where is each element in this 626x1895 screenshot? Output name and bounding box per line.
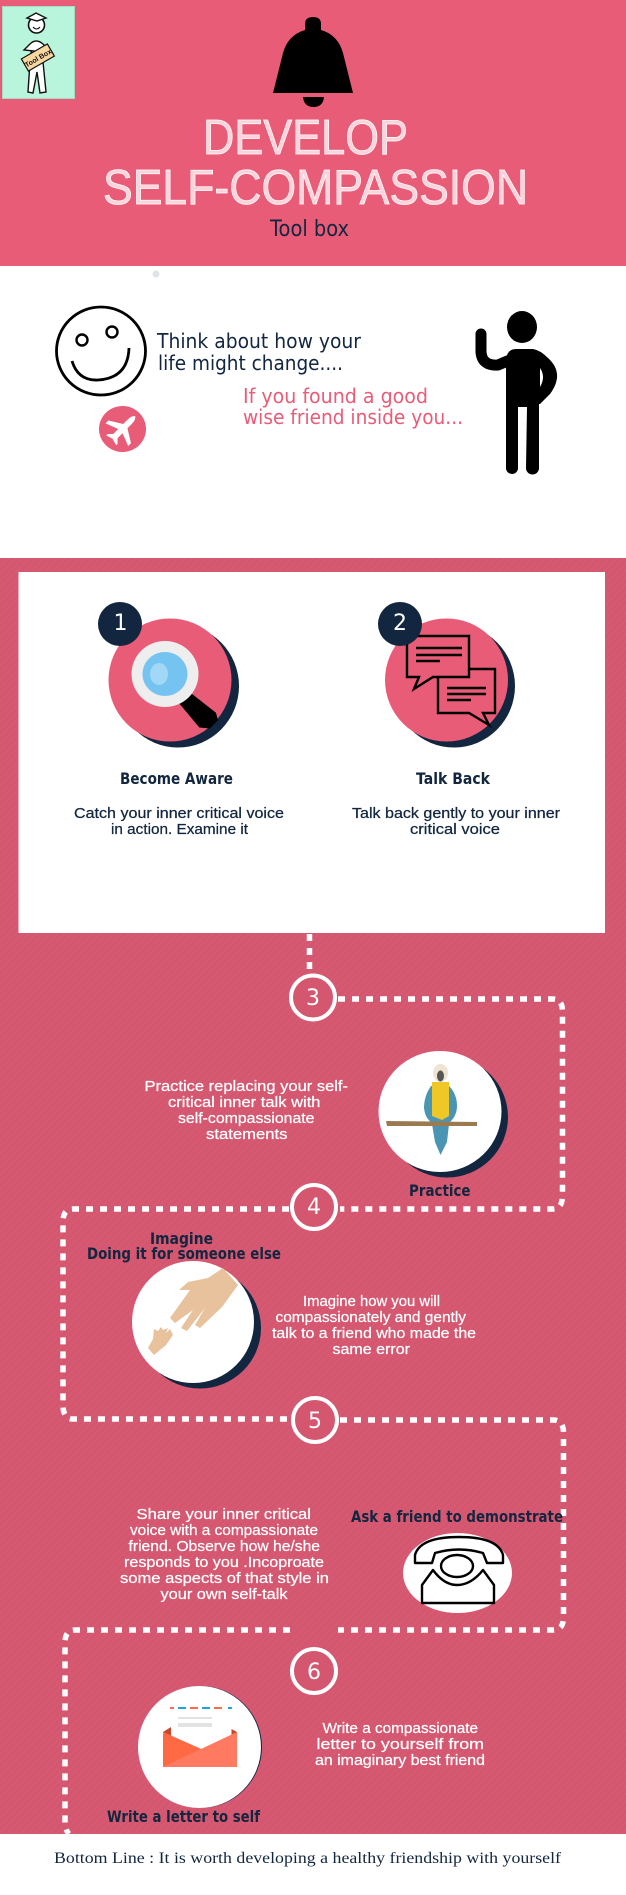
text: share description: friend. Observe how he/she (128, 1538, 320, 1555)
title: DEVELOP (203, 111, 408, 165)
text: practice description (144, 1078, 348, 1143)
title: SELF-COMPASSION (103, 161, 528, 215)
text: letter description: letter to yourself from (316, 1736, 484, 1753)
text: share description: voice with a compassionate (130, 1522, 318, 1539)
dashed connector path (63, 934, 564, 1834)
text: step 2 description: Talk back gently to your inner (352, 805, 560, 822)
text: practice description: statements (206, 1126, 288, 1143)
text: imagine description: same error (332, 1341, 410, 1358)
text: letter description: Write a compassionate (322, 1720, 478, 1737)
text: imagine description (272, 1293, 476, 1358)
step marker: 6: 6 (307, 1660, 321, 1685)
panel: steps 1 and 2 (18, 572, 605, 933)
text: letter description (315, 1720, 485, 1769)
icon: tool box character: Tool Box (24, 48, 53, 69)
icon: parrot (378, 1051, 508, 1178)
text: wise friend: If you found a good (243, 384, 428, 408)
text: step 2 description (352, 805, 560, 838)
text: practice description: Practice replacing your self- (144, 1078, 348, 1095)
text: step 1 description (74, 805, 284, 838)
text: wise friend (243, 384, 463, 429)
text: share description: some aspects of that style in (120, 1570, 329, 1587)
icon: reaching hands (132, 1261, 261, 1388)
icon: waving person (481, 311, 557, 474)
icon: magnifier step 1 (108, 618, 239, 748)
icon: telephone (403, 1533, 512, 1613)
step marker: 4 (292, 1185, 336, 1229)
step marker: 5 (293, 1398, 337, 1442)
panel: steps background (0, 558, 626, 1834)
decorative dot (152, 270, 160, 278)
heading: talk back: Talk Back (416, 769, 490, 788)
icon: tool box character (2, 6, 74, 98)
text: step 1 description: in action. Examine it (111, 821, 249, 838)
step marker: 5: 5 (308, 1409, 322, 1434)
text: share description: your own self-talk (160, 1586, 288, 1603)
badge: 1: 1 (114, 611, 128, 636)
panel: header (0, 0, 626, 266)
title (103, 111, 528, 215)
heading: practice: Practice (409, 1181, 471, 1200)
subtitle: Tool box (269, 217, 349, 242)
text: letter description: an imaginary best friend (315, 1752, 485, 1769)
icon: speech bubbles step 2 (385, 618, 515, 748)
step marker: 3 (291, 976, 335, 1020)
footer: bottom line: Bottom Line : It is worth developing a healthy friendship with yourself (54, 1850, 562, 1867)
text: wise friend: wise friend inside you... (243, 405, 463, 429)
text: share description: responds to you .Incoproate (124, 1554, 324, 1571)
step marker: 3: 3 (306, 986, 320, 1011)
heading: ask a friend: Ask a friend to demonstrate (351, 1507, 563, 1526)
heading: imagine (87, 1229, 281, 1263)
step marker: 4: 4 (307, 1195, 321, 1220)
text: think about your life: life might change.... (158, 351, 343, 375)
icon: airplane badge (99, 405, 147, 452)
icon: bell (273, 17, 353, 107)
heading: become aware: Become Aware (120, 769, 233, 788)
heading: imagine: Imagine (150, 1229, 213, 1248)
text: step 1 description: Catch your inner critical voice (74, 805, 284, 822)
text: share description: Share your inner critical (136, 1506, 311, 1523)
text: imagine description: talk to a friend who made the (272, 1325, 476, 1342)
icon: smiley face (56, 307, 146, 395)
text: practice description: critical inner talk with (168, 1094, 320, 1111)
step marker: 6 (292, 1649, 336, 1693)
text: think about your life: Think about how your (156, 329, 362, 353)
badge: 2: 2 (393, 611, 407, 636)
icon: envelope (138, 1686, 262, 1808)
text: practice description: self-compassionate (178, 1110, 314, 1127)
text: imagine description: compassionately and gently (276, 1309, 467, 1326)
text: step 2 description: critical voice (410, 821, 500, 838)
text: share description (120, 1506, 329, 1603)
heading: write a letter: Write a letter to self (107, 1807, 261, 1826)
text: think about your life (156, 329, 362, 375)
badge: 2 (378, 602, 422, 646)
text: imagine description: Imagine how you will (303, 1293, 440, 1310)
heading: imagine: Doing it for someone else (87, 1244, 281, 1263)
badge: 1 (98, 602, 142, 646)
